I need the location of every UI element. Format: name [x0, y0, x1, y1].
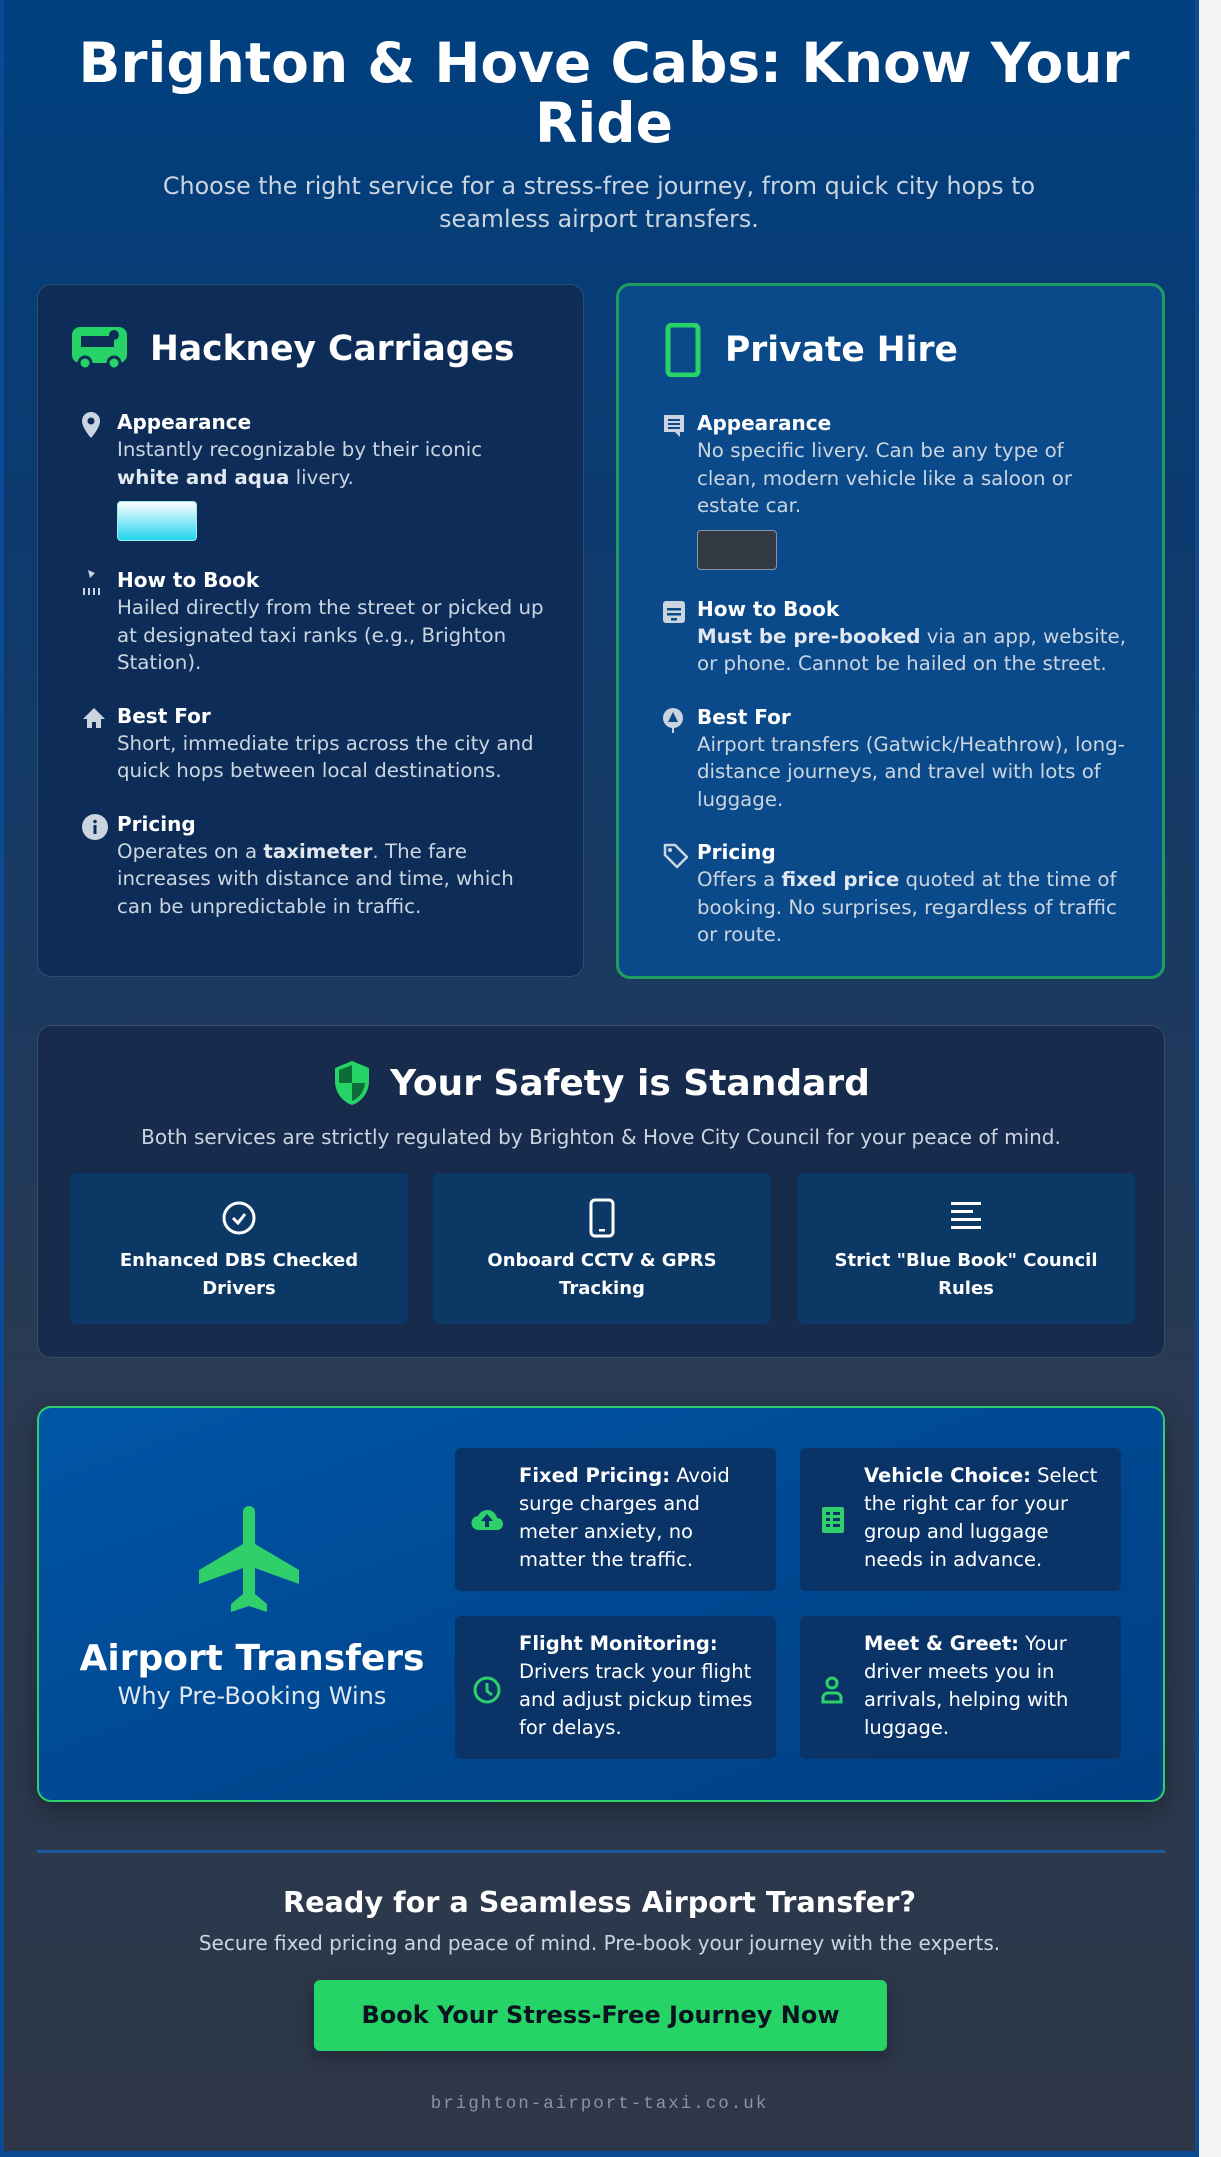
benefit: fixed pricing — [455, 1448, 776, 1591]
benefit: meet and greet — [800, 1616, 1121, 1759]
item: best for: distance journeys, and travel with lots of — [697, 760, 1101, 783]
benefit: vehicle choice — [800, 1448, 1121, 1591]
panel: hackney carriages — [37, 284, 584, 977]
item: best for: luggage. — [697, 788, 783, 810]
CTA button: Book Your Stress-Free Journey Now — [362, 2001, 839, 2029]
safety item: blue book: Strict "Blue Book" Council — [834, 1250, 1098, 1271]
item: best for: Best For — [117, 704, 211, 728]
item: best for — [663, 704, 1125, 810]
panel: private hire — [616, 283, 1165, 979]
item: appearance — [82, 410, 482, 541]
item: how to book: Must be pre-booked via an app, website, — [697, 624, 1126, 648]
item: appearance: Instantly recognizable by their iconic white and aqua livery. — [117, 438, 482, 488]
item: how to book: or phone. Cannot be hailed on the street. — [697, 652, 1107, 675]
subtitle: Choose the right service for a stress-free journey, from quick city hops to seamless airport transfers. — [163, 172, 1035, 233]
card heading: private hire — [666, 323, 958, 377]
item: pricing: Operates on a taximeter. The fare increases with distance and time, which can be unpredictable in traffic. — [117, 840, 514, 918]
safety subtitle: Both services are strictly regulated by Brighton & Hove City Council for your peace of mind. — [141, 1125, 1061, 1149]
benefit: fixed pricing: Fixed Pricing: Avoid surge charges and meter anxiety, no matter the traffic. — [519, 1464, 730, 1571]
panel: safety — [37, 1025, 1165, 1358]
safety item: CCTV — [433, 1173, 771, 1324]
item: how to book: Hailed directly from the street or picked up at designated taxi ranks (e.g., Brighton Station). — [117, 596, 544, 674]
safety item: CCTV: Onboard CCTV & GPRS — [487, 1250, 717, 1271]
safety item: DBS: Enhanced DBS Checked — [120, 1250, 358, 1271]
item: best for — [83, 704, 534, 782]
benefit: meet and greet: Meet & Greet: Your driver meets you in arrivals, helping with luggage. — [864, 1632, 1068, 1739]
item: best for: Airport transfers (Gatwick/Heathrow), long- — [697, 732, 1125, 756]
safety item: DBS: Drivers — [202, 1278, 276, 1299]
airport heading: Airport Transfers — [80, 1638, 424, 1679]
item: how to book — [83, 568, 544, 674]
item: how to book: How to Book — [117, 568, 259, 592]
safety item: CCTV: Tracking — [559, 1278, 645, 1299]
card heading: hackney: Hackney Carriages — [150, 329, 514, 369]
item: appearance: clean, modern vehicle like a saloon or — [697, 466, 1072, 490]
title: Brighton & Hove Cabs: Know Your Ride — [78, 31, 1130, 155]
benefit: vehicle choice: Vehicle Choice: Select the right car for your group and luggage needs in advance. — [864, 1464, 1097, 1571]
item: pricing: Pricing — [697, 840, 776, 864]
card heading: private hire: Private Hire — [725, 330, 958, 370]
airport subheading: Why Pre-Booking Wins — [118, 1682, 386, 1710]
item: pricing: booking. No surprises, regardless of traffic — [697, 896, 1117, 918]
footer url: brighton-airport-taxi.co.uk — [431, 2094, 768, 2114]
benefit: flight monitoring: Flight Monitoring: Drivers track your flight and adjust pickup times for delays. — [519, 1632, 752, 1739]
item: appearance: No specific livery. Can be any type of — [697, 439, 1064, 462]
safety item: DBS — [70, 1173, 408, 1324]
item: how to book — [663, 596, 1126, 675]
safety item: blue book — [797, 1173, 1135, 1324]
item: appearance: Appearance — [117, 410, 251, 434]
CTA heading: Ready for a Seamless Airport Transfer? — [283, 1885, 916, 1919]
item: how to book: How to Book — [697, 596, 839, 620]
item: appearance: estate car. — [697, 494, 801, 517]
item: appearance: Appearance — [697, 411, 831, 435]
item: pricing — [664, 840, 1117, 946]
item: pricing: or route. — [697, 923, 782, 946]
safety heading: Your Safety is Standard — [390, 1062, 870, 1104]
panel: airport transfers — [37, 1406, 1165, 1802]
item: pricing: Pricing — [117, 812, 196, 836]
item: pricing — [82, 812, 514, 918]
item: best for: Best For — [697, 704, 791, 728]
CTA text: Secure fixed pricing and peace of mind. Pre-book your journey with the experts. — [199, 1931, 1000, 1955]
CTA button — [314, 1980, 887, 2051]
safety item: blue book: Rules — [938, 1278, 994, 1299]
item: pricing: Offers a fixed price quoted at the time of — [697, 868, 1116, 891]
item: best for: Short, immediate trips across the city and quick hops between local destinations. — [117, 732, 534, 782]
item: appearance — [664, 411, 1072, 570]
icon: plane — [199, 1506, 299, 1612]
benefit: flight monitoring — [455, 1616, 776, 1759]
